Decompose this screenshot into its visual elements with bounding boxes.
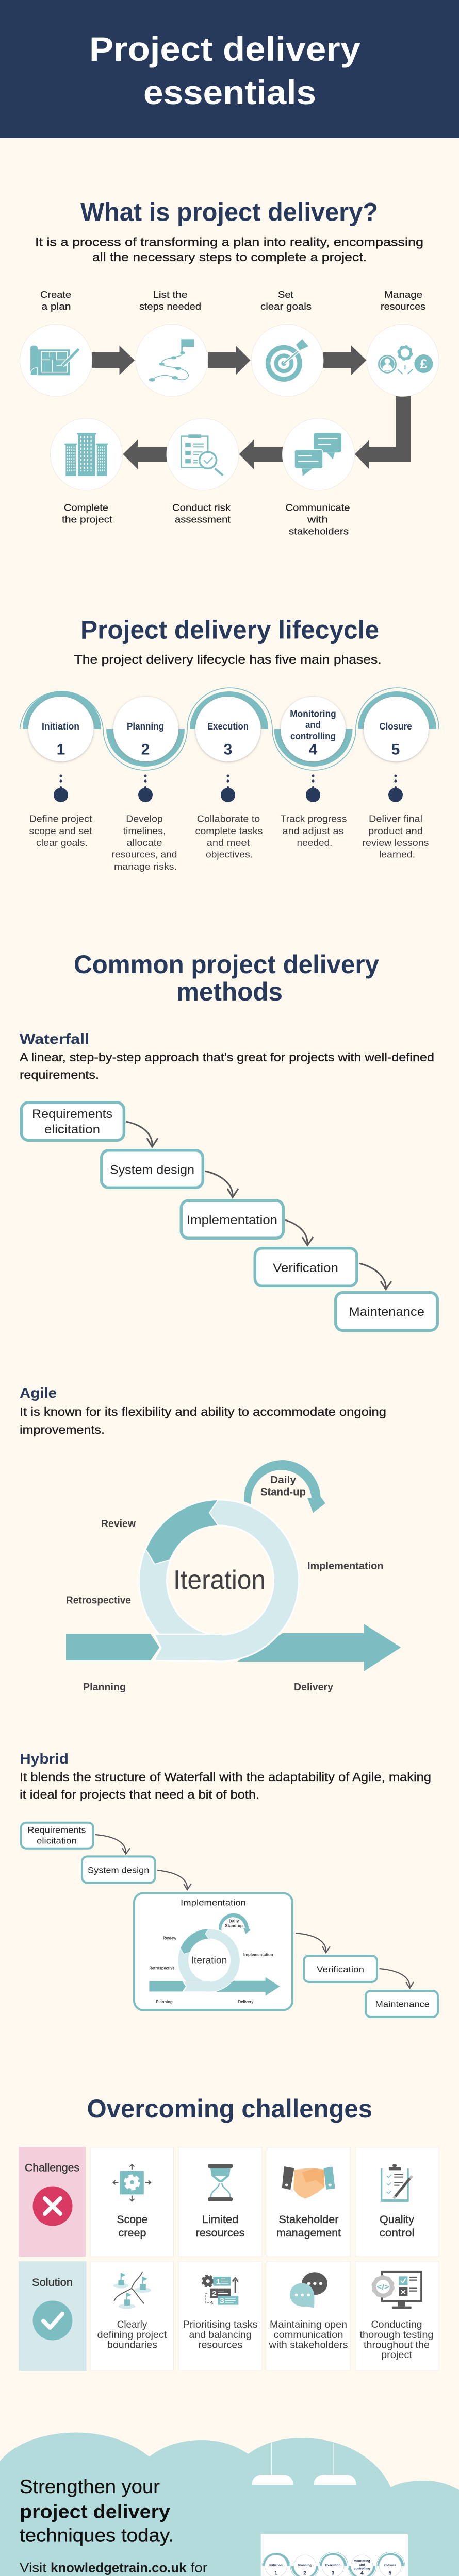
lifecycle wave chart bbox=[20, 688, 439, 872]
phase numbers: 3 bbox=[224, 741, 232, 758]
icon: handshake bbox=[282, 2166, 335, 2199]
waterfall diagram: Maintenance bbox=[349, 1305, 424, 1319]
call to action text: project delivery bbox=[20, 2501, 170, 2522]
waterfall diagram: elicitation bbox=[44, 1123, 100, 1137]
solution labels: Clearly bbox=[117, 2319, 147, 2330]
call to action backdrop bbox=[0, 2433, 459, 2576]
challenge labels bbox=[117, 2214, 415, 2239]
waterfall description bbox=[20, 1050, 434, 1081]
waterfall heading: Waterfall bbox=[20, 1031, 89, 1047]
mini lifecycle on board: Execution bbox=[325, 2564, 340, 2567]
call to action text: techniques today. bbox=[20, 2525, 174, 2546]
phase descriptions: objectives. bbox=[206, 850, 253, 860]
phase descriptions: Track progress bbox=[281, 814, 347, 824]
mini agile diagram: Delivery bbox=[238, 1999, 254, 2004]
intro text bbox=[35, 235, 423, 264]
agile iteration diagram: Retrospective bbox=[66, 1595, 131, 1606]
solution labels: resources bbox=[198, 2340, 242, 2350]
phase names: Execution bbox=[207, 721, 249, 732]
step labels bottom row: Complete bbox=[64, 502, 108, 513]
agile iteration diagram: Daily bbox=[270, 1475, 297, 1486]
icon: prioritising tasks: 1 bbox=[216, 2278, 221, 2286]
heading: what is project delivery: What is project delivery? bbox=[80, 198, 378, 227]
agile iteration diagram: Planning bbox=[83, 1682, 126, 1693]
hybrid diagram: Implementation bbox=[181, 1898, 246, 1908]
phase names: controlling bbox=[290, 731, 336, 741]
hybrid description: It blends the structure of Waterfall with the adaptability of Agile, making bbox=[20, 1770, 431, 1784]
step labels bottom row bbox=[62, 502, 350, 537]
hybrid diagram: Maintenance bbox=[375, 1999, 430, 2009]
solution labels bbox=[97, 2319, 433, 2361]
phase descriptions: Collaborate to bbox=[197, 814, 260, 824]
heading: common methods: methods bbox=[176, 977, 283, 1006]
agile iteration diagram: Delivery bbox=[294, 1682, 334, 1693]
intro text: It is a process of transforming a plan into reality, encompassing bbox=[35, 235, 423, 248]
visit website text: Visit bbox=[20, 2560, 47, 2575]
mini agile diagram: Iteration bbox=[191, 1955, 227, 1966]
icon: open communication bbox=[290, 2272, 327, 2308]
icon: testing monitor: </> bbox=[376, 2283, 389, 2291]
phase names: Planning bbox=[127, 721, 164, 732]
title bbox=[89, 30, 360, 111]
icon: testing monitor bbox=[372, 2272, 421, 2309]
agile description bbox=[20, 1405, 386, 1436]
icon: quality clipboard bbox=[381, 2164, 412, 2201]
agile iteration diagram bbox=[66, 1460, 401, 1693]
icon: route with flag bbox=[149, 339, 194, 382]
phase names: and bbox=[305, 720, 321, 730]
phase names bbox=[42, 709, 412, 741]
challenge labels: Quality bbox=[380, 2214, 415, 2226]
lifecycle intro text: The project delivery lifecycle has five main phases. bbox=[74, 653, 382, 666]
process arrows bbox=[92, 346, 411, 469]
phase numbers: 4 bbox=[309, 741, 318, 758]
visit website text bbox=[20, 2560, 243, 2576]
phase descriptions: learned. bbox=[379, 850, 415, 860]
panel: solution side: Solution bbox=[32, 2277, 73, 2289]
phase descriptions: scope and set bbox=[29, 826, 92, 836]
mini agile diagram: Stand-up bbox=[225, 1923, 243, 1928]
mini agile diagram bbox=[149, 1913, 280, 2004]
panel: challenges side: Challenges bbox=[25, 2162, 79, 2174]
agile iteration diagram: Implementation bbox=[307, 1561, 384, 1572]
step labels top row: Set bbox=[278, 290, 293, 300]
challenge labels: control bbox=[380, 2227, 415, 2239]
phase descriptions: allocate bbox=[127, 838, 162, 848]
phase numbers: 1 bbox=[57, 741, 65, 758]
presentation board bbox=[261, 2534, 408, 2576]
mini agile diagram: Retrospective bbox=[149, 1965, 175, 1970]
phase numbers bbox=[57, 741, 400, 758]
mini agile diagram: Daily bbox=[229, 1919, 239, 1923]
challenge labels: resources bbox=[196, 2227, 244, 2239]
hybrid description: it ideal for projects that need a bit of both. bbox=[20, 1788, 259, 1801]
solution labels: throughout the bbox=[364, 2340, 430, 2350]
phase names: Monitoring bbox=[290, 709, 336, 719]
icon: speech bubbles bbox=[294, 433, 341, 476]
solution labels: Prioritising tasks bbox=[183, 2319, 258, 2330]
phase descriptions: product and bbox=[368, 826, 423, 836]
phase descriptions: manage risks. bbox=[114, 861, 177, 872]
step labels bottom row: the project bbox=[62, 515, 112, 525]
title: Project delivery bbox=[89, 30, 360, 68]
phase numbers: 5 bbox=[391, 741, 400, 758]
phase descriptions: complete tasks bbox=[195, 826, 263, 836]
step labels bottom row: Communicate bbox=[286, 502, 350, 513]
panel: solution side bbox=[19, 2261, 87, 2371]
ceiling lamps bbox=[252, 2443, 356, 2485]
waterfall diagram bbox=[21, 1103, 437, 1330]
heading: lifecycle: Project delivery lifecycle bbox=[80, 616, 379, 645]
icon: project boundaries flags bbox=[113, 2272, 151, 2309]
step labels bottom row: Conduct risk bbox=[172, 502, 231, 513]
hybrid diagram: System design bbox=[88, 1866, 149, 1875]
phase descriptions: resources, and bbox=[111, 850, 177, 860]
solution labels: with stakeholders bbox=[268, 2340, 348, 2350]
waterfall diagram: Implementation bbox=[187, 1213, 277, 1227]
waterfall diagram: System design bbox=[110, 1163, 194, 1177]
agile description: It is known for its flexibility and ability to accommodate ongoing bbox=[20, 1405, 386, 1418]
agile iteration diagram: Review bbox=[101, 1518, 136, 1530]
visit website text: for bbox=[191, 2560, 207, 2575]
step circles bbox=[20, 324, 439, 490]
solution labels: communication bbox=[273, 2330, 343, 2341]
hybrid diagram: Verification bbox=[317, 1964, 364, 1974]
waterfall diagram: Verification bbox=[273, 1261, 338, 1275]
phase descriptions: Define project bbox=[29, 814, 92, 824]
phase dots bbox=[54, 774, 403, 802]
icon: buildings bbox=[64, 433, 108, 476]
agile iteration diagram: Iteration bbox=[173, 1565, 266, 1595]
waterfall description: requirements. bbox=[20, 1068, 99, 1081]
header band bbox=[0, 0, 459, 138]
heading: overcoming challenges: Overcoming challenges bbox=[87, 2094, 372, 2123]
phase descriptions bbox=[29, 814, 429, 872]
icon: manage resources bbox=[378, 347, 433, 374]
phase descriptions: and adjust as bbox=[283, 826, 343, 836]
step labels top row: a plan bbox=[41, 301, 71, 312]
phase descriptions: clear goals. bbox=[36, 838, 88, 848]
hybrid diagram: Requirements bbox=[28, 1825, 86, 1835]
step labels top row: resources bbox=[381, 301, 425, 312]
heading: common methods: Common project delivery bbox=[74, 950, 379, 979]
icon: manage resources: £ bbox=[420, 357, 427, 371]
step labels top row bbox=[40, 290, 425, 312]
waterfall description: A linear, step-by-step approach that's great for projects with well-defined bbox=[20, 1050, 434, 1064]
mini lifecycle on board: Monitoring bbox=[354, 2560, 370, 2563]
step labels top row: steps needed bbox=[139, 301, 201, 312]
solution labels: defining project bbox=[97, 2330, 167, 2341]
icon: scope creep bbox=[113, 2164, 151, 2201]
mini lifecycle on board: Closure bbox=[384, 2564, 396, 2567]
agile iteration diagram: Stand-up bbox=[260, 1487, 306, 1498]
solution labels: boundaries bbox=[107, 2340, 157, 2350]
step labels bottom row: with bbox=[307, 515, 328, 525]
phase descriptions: and meet bbox=[207, 838, 250, 848]
challenge labels: creep bbox=[119, 2227, 146, 2239]
icon: target bbox=[266, 339, 308, 382]
icon: prioritising tasks: 3 bbox=[220, 2297, 224, 2305]
solution labels: and balancing bbox=[189, 2330, 252, 2341]
mini lifecycle on board: Planning bbox=[298, 2564, 312, 2567]
agile description: improvements. bbox=[20, 1423, 105, 1436]
step labels top row: Create bbox=[40, 290, 71, 300]
hybrid diagram: elicitation bbox=[37, 1836, 77, 1846]
heading: common methods bbox=[74, 950, 379, 1006]
mini agile diagram: Review bbox=[163, 1936, 177, 1940]
icon: prioritising tasks bbox=[203, 2276, 238, 2305]
call to action text: Strengthen your bbox=[20, 2476, 160, 2497]
challenge labels: Limited bbox=[202, 2214, 238, 2226]
solution labels: project bbox=[381, 2350, 413, 2361]
challenge labels: management bbox=[276, 2227, 341, 2239]
mini lifecycle on board: Initiation bbox=[269, 2564, 283, 2567]
step labels bottom row: assessment bbox=[175, 515, 231, 525]
phase numbers: 2 bbox=[141, 741, 150, 758]
hybrid description bbox=[20, 1770, 431, 1801]
phase descriptions: needed. bbox=[297, 838, 332, 848]
agile heading: Agile bbox=[20, 1385, 57, 1401]
step labels top row: clear goals bbox=[260, 301, 312, 312]
mini lifecycle on board: controlling bbox=[354, 2567, 370, 2570]
mini lifecycle on board bbox=[262, 2552, 405, 2576]
solution labels: Conducting bbox=[371, 2319, 422, 2330]
icon: blueprint plan bbox=[30, 346, 79, 375]
visit website text: knowledgetrain.co.uk bbox=[51, 2560, 187, 2575]
hybrid heading: Hybrid bbox=[20, 1751, 69, 1767]
phase descriptions: timelines, bbox=[123, 826, 166, 836]
phase names: Initiation bbox=[42, 721, 79, 732]
icon: risk assessment clipboard bbox=[181, 434, 223, 476]
step labels top row: List the bbox=[153, 290, 188, 300]
challenge labels: Stakeholder bbox=[278, 2214, 339, 2226]
icon: prioritising tasks: 2 bbox=[212, 2290, 217, 2298]
solution labels: Maintaining open bbox=[270, 2319, 347, 2330]
challenge and solution cards bbox=[90, 2147, 439, 2370]
phase names: Closure bbox=[379, 721, 412, 732]
phase descriptions: review lessons bbox=[362, 838, 429, 848]
title: essentials bbox=[143, 73, 316, 111]
solution labels: thorough testing bbox=[360, 2330, 433, 2341]
hybrid diagram bbox=[21, 1823, 438, 2017]
icon: hourglass bbox=[208, 2164, 233, 2201]
challenge labels: Scope bbox=[117, 2214, 147, 2226]
phase descriptions: Develop bbox=[126, 814, 163, 824]
phase descriptions: Deliver final bbox=[369, 814, 422, 824]
mini lifecycle on board: and bbox=[359, 2563, 365, 2567]
panel: challenges side bbox=[19, 2147, 86, 2257]
mini agile diagram: Implementation bbox=[243, 1952, 273, 1957]
step labels bottom row: stakeholders bbox=[289, 527, 349, 537]
mini agile diagram: Planning bbox=[156, 1999, 173, 2004]
step labels top row: Manage bbox=[384, 290, 422, 300]
waterfall diagram: Requirements bbox=[32, 1107, 112, 1121]
intro text: all the necessary steps to complete a project. bbox=[92, 250, 367, 264]
call to action text bbox=[20, 2476, 174, 2546]
